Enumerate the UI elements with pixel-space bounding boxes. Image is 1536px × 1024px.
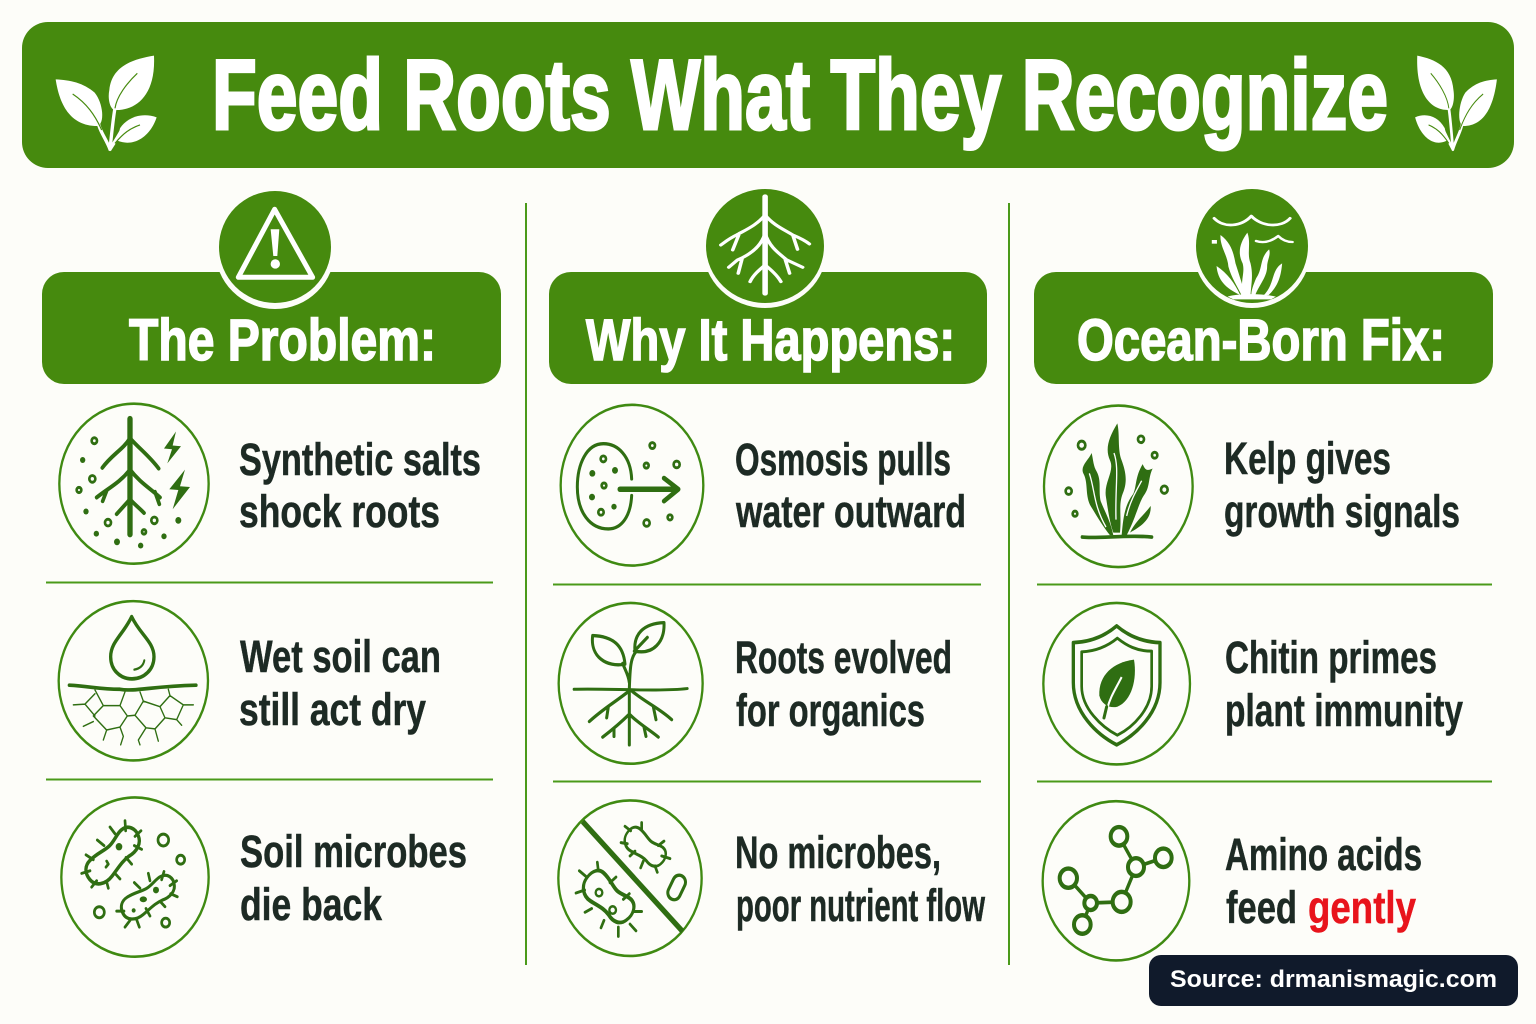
text: kelp: Kelp gives <box>1224 433 1391 484</box>
text: synthetic salts <box>239 434 481 537</box>
text: amino acids: feed <box>1226 882 1297 933</box>
text: chitin: Chitin primes <box>1225 632 1437 683</box>
icon: left leaf sprig <box>56 56 157 149</box>
icon: right leaf sprig <box>1415 56 1497 149</box>
text: osmosis <box>735 434 966 537</box>
row: synthetic salts <box>59 404 481 564</box>
row: wet soil <box>59 601 441 760</box>
text: soil microbes: die back <box>240 879 383 930</box>
text: kelp <box>1224 433 1460 537</box>
text: chitin <box>1225 632 1463 736</box>
text: amino acids <box>1225 829 1422 933</box>
icon: roots and salts with lightning <box>59 404 209 564</box>
panel: Ocean-Born Fix <box>1034 188 1493 960</box>
column divider left <box>525 203 527 965</box>
text: roots evolved: Roots evolved <box>735 632 952 683</box>
text: amino acids: Amino acids <box>1225 829 1422 880</box>
icon: crossed-out microbes <box>558 800 702 956</box>
text: roots evolved: for organics <box>736 685 925 736</box>
text: wet soil <box>239 631 441 735</box>
text: soil microbes: Soil microbes <box>240 826 467 877</box>
text: osmosis: water outward <box>735 486 966 537</box>
text: roots evolved <box>735 632 952 736</box>
heading: The Problem: The Problem: <box>129 308 436 373</box>
text: synthetic salts: Synthetic salts <box>239 434 481 485</box>
header badge: roots <box>703 188 827 308</box>
header band: The Problem <box>42 272 501 384</box>
header badge: warning <box>215 189 335 309</box>
icon: seedling with roots <box>559 603 703 764</box>
row: no microbes <box>558 800 986 956</box>
text: chitin: plant immunity <box>1225 685 1463 736</box>
header badge: seaweed and waves <box>1193 188 1311 308</box>
icon: kelp <box>1044 406 1193 567</box>
text: wet soil: still act dry <box>239 684 426 735</box>
column divider right <box>1008 203 1010 965</box>
panel: Why It Happens <box>549 188 987 956</box>
icon: osmosis cell and arrow <box>561 405 703 566</box>
row: amino acids <box>1043 801 1422 960</box>
panel: The Problem <box>42 189 501 957</box>
text: osmosis: Osmosis pulls <box>735 434 951 485</box>
source badge <box>1149 955 1518 1006</box>
header band: Ocean-Born Fix <box>1034 272 1493 384</box>
heading: Why It Happens: Why It Happens: <box>586 308 955 373</box>
text: wet soil: Wet soil can <box>240 631 441 682</box>
icon: bacteria <box>61 797 209 957</box>
icon: molecule <box>1043 801 1189 960</box>
text: no microbes <box>735 827 986 931</box>
title banner <box>22 22 1514 168</box>
row: roots evolved <box>559 603 952 764</box>
row: kelp <box>1044 406 1460 567</box>
row: chitin <box>1043 603 1463 764</box>
text: amino acids: gently <box>1308 882 1416 933</box>
row: osmosis <box>561 405 966 566</box>
text: no microbes: No microbes, <box>735 827 941 878</box>
heading: Ocean-Born Fix: Ocean-Born Fix: <box>1077 308 1445 373</box>
icon: shield with leaf <box>1043 603 1190 764</box>
text: no microbes: poor nutrient flow <box>736 880 986 931</box>
text: synthetic salts: shock roots <box>239 486 440 537</box>
row: soil microbes <box>61 797 467 957</box>
text: kelp: growth signals <box>1224 486 1460 537</box>
source badge: Source: drmanismagic.com <box>1170 966 1497 993</box>
text: soil microbes <box>240 826 467 930</box>
header band: Why It Happens <box>549 272 987 384</box>
icon: water drop over cracked soil <box>59 601 208 760</box>
